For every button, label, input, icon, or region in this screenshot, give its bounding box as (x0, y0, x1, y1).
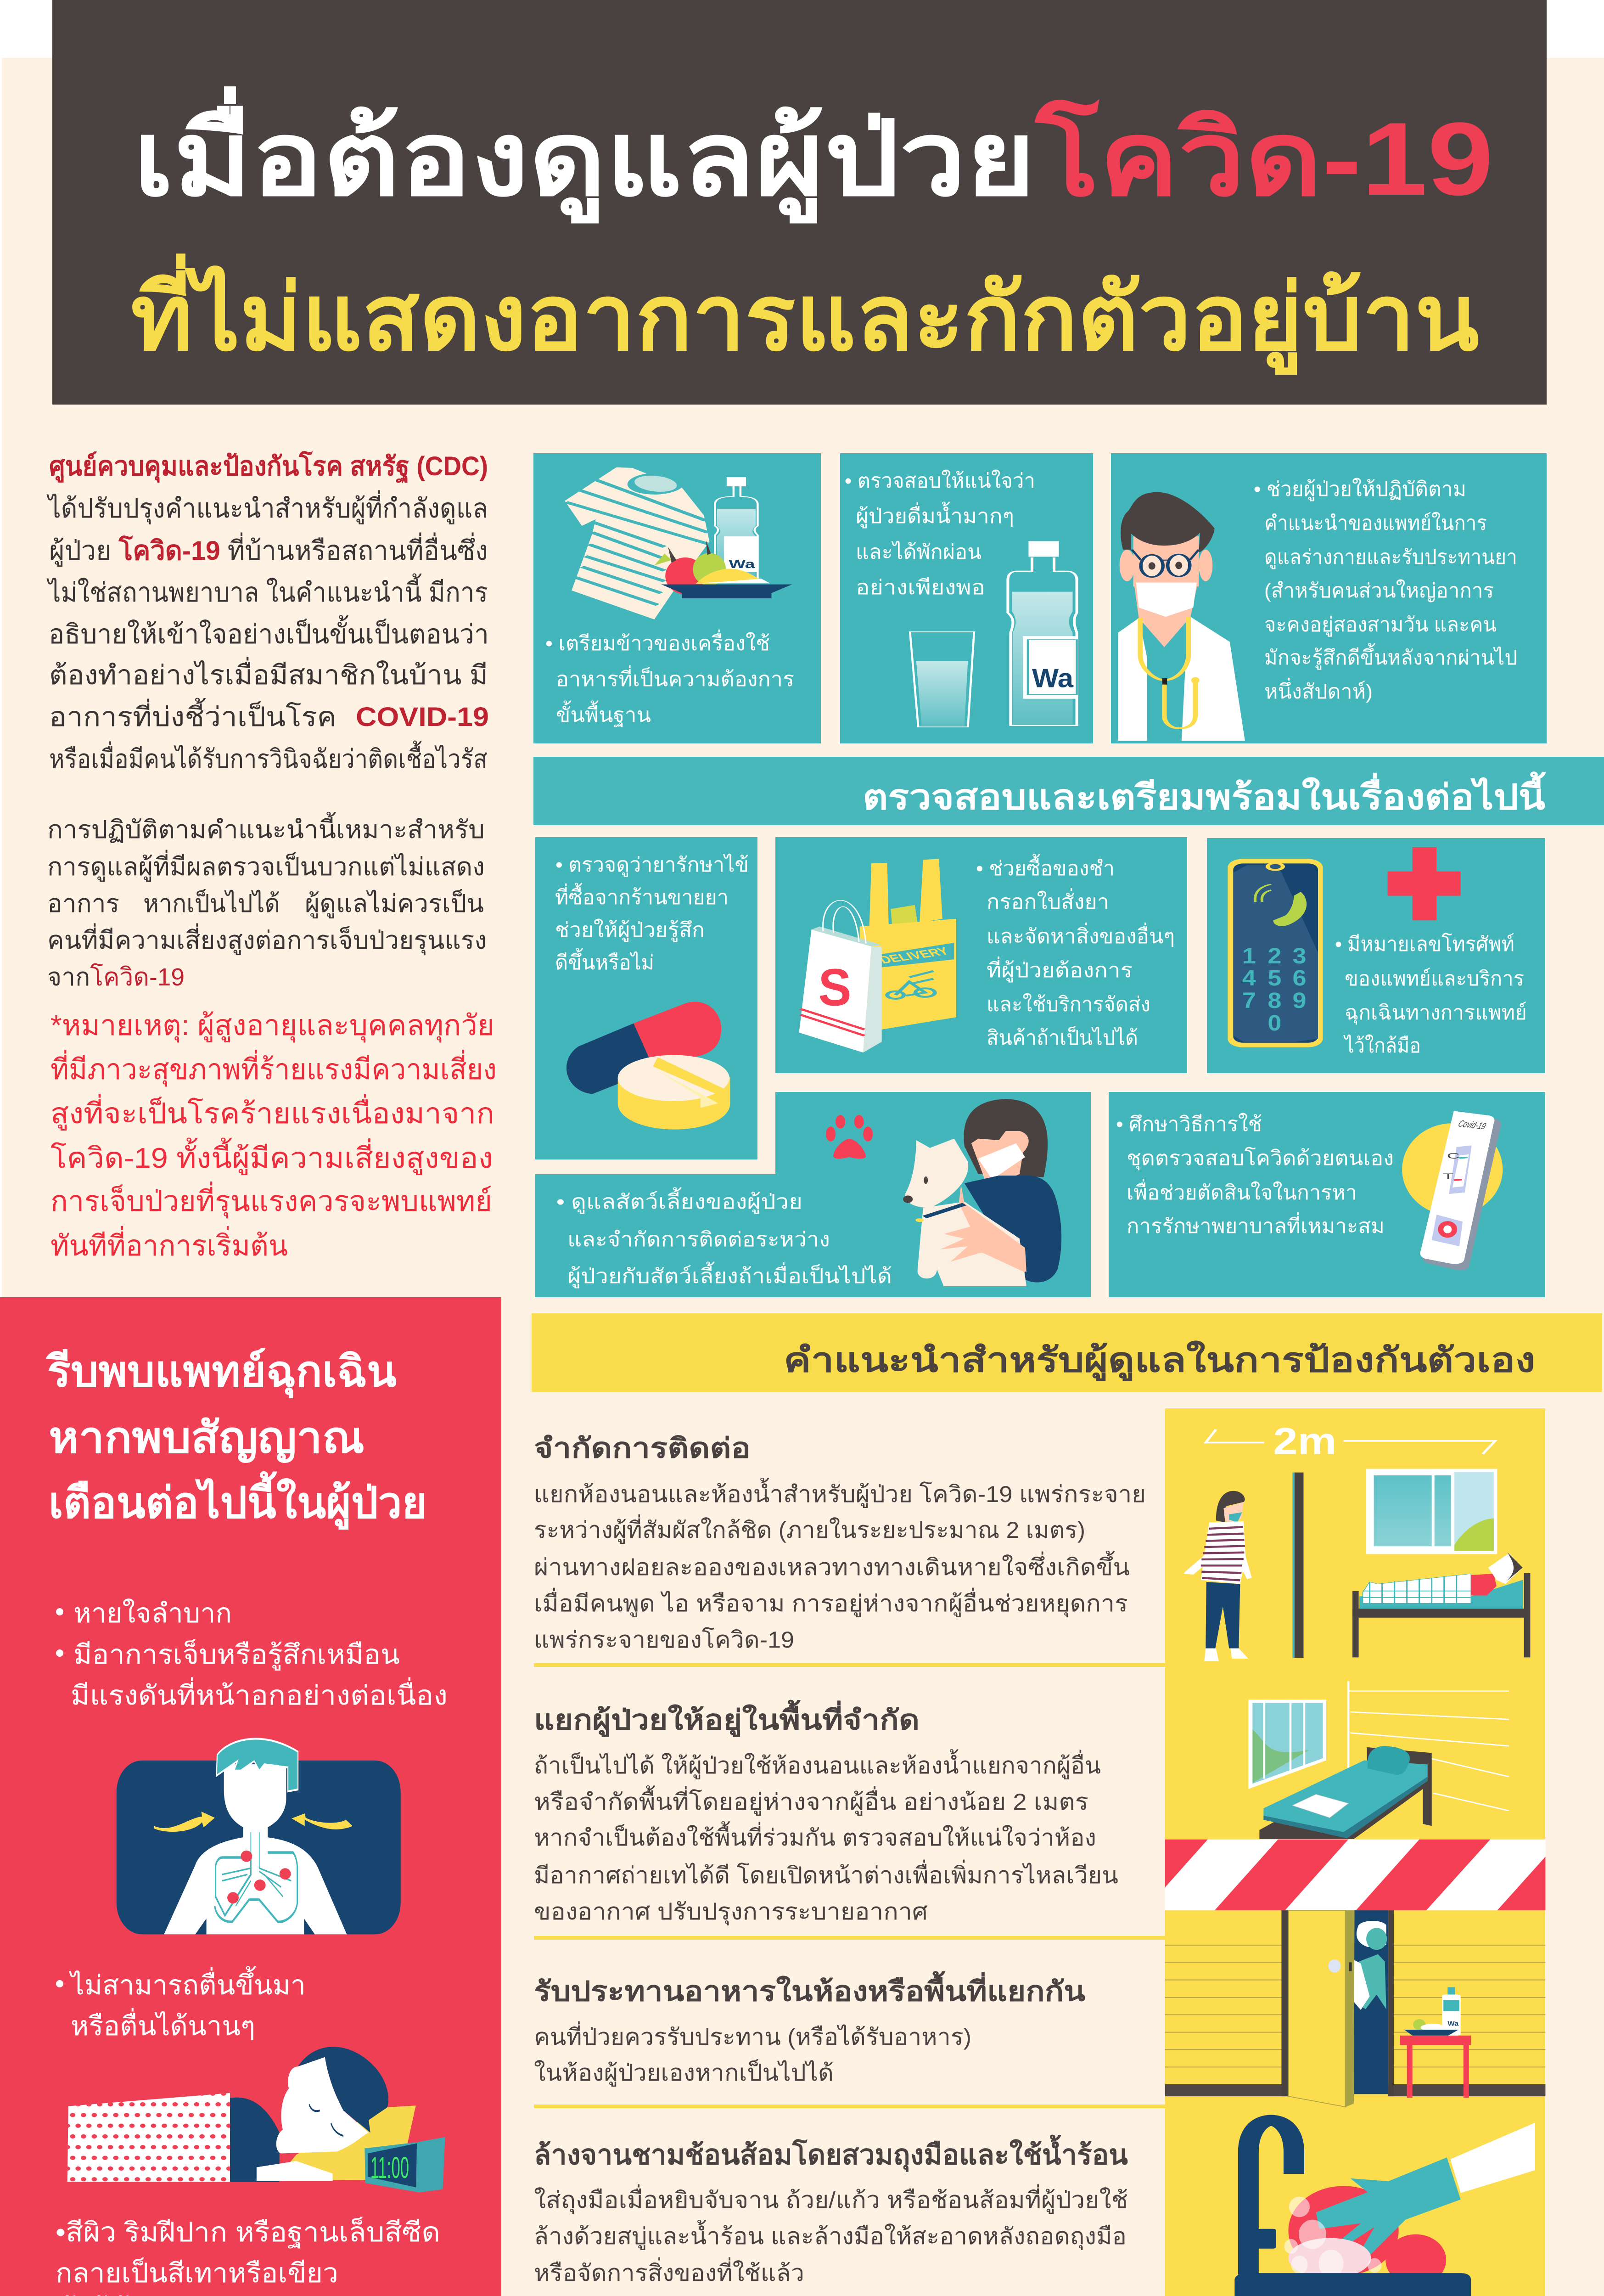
guidance 2: isolate patient (534, 1699, 1118, 1925)
guidance 4: wash dishes: ใส่ถุงมือเมื่อหยิบจับจาน ถ้วย/แก้ว หรือช้อนส้อมที่ผู้ป่วยใช้ (534, 2184, 1128, 2214)
illustration: washing dishes (1234, 2121, 1535, 2296)
text: breathing and chest symptoms (56, 1598, 448, 1711)
intro paragraph: CDC guidance: ได้ปรับปรุงคำแนะนำสำหรับผู้ที่กำลังดูแล (46, 490, 488, 525)
intro paragraph: who this applies to: จากโควิด-19 (47, 963, 185, 991)
text: follow doctor's advice: จะคงอยู่สองสามวัน และคน (1264, 613, 1497, 637)
guidance 1: limit contact: เมื่อมีคนพูด ไอ หรือจาม การอยู่ห่างจากผู้อื่นช่วยหยุดการ (534, 1588, 1128, 1617)
guidance 4: wash dishes: ล้างจานชามช้อนส้อมโดยสวมถุงมือและใช้น้ำร้อน (534, 2134, 1128, 2172)
illustration: two metre distance (1183, 1420, 1530, 1661)
panel: emergency warning signs (0, 1297, 501, 2296)
panel: drink water and rest: Wa (1032, 664, 1073, 693)
panel: drink water and rest (840, 453, 1093, 743)
illustration: barrier, door and food tray (1165, 1840, 1545, 2107)
text: follow doctor's advice: หนึ่งสัปดาห์) (1264, 677, 1373, 703)
text: phone numbers: ฉุกเฉินทางการแพทย์ (1345, 1002, 1527, 1025)
guidance 1: limit contact: ระหว่างผู้ที่สัมผัสใกล้ชิด (ภายในระยะประมาณ 2 เมตร) (534, 1514, 1085, 1544)
guidance 2: isolate patient: ถ้าเป็นไปได้ ให้ผู้ป่วยใช้ห้องนอนและห้องน้ำแยกจากผู้อื่น (534, 1749, 1101, 1779)
text: cannot wake: ไม่สามารถตื่นขึ้นมา (69, 1966, 306, 2000)
text: prepare food: • เตรียมข้าวของเครื่องใช้ (545, 629, 770, 655)
icon: covid antigen test: Covid-19 (1456, 1119, 1488, 1131)
intro paragraph: who this applies to: ผู้ดูแลไม่ควรเป็น (305, 889, 484, 918)
text: help with shopping: • ช่วยซื้อของชำ (976, 854, 1115, 880)
text: fever medicine: ช่วยให้ผู้ป่วยรู้สึก (555, 918, 705, 942)
text: follow doctor's advice: มักจะรู้สึกดีขึ้นหลังจากผ่านไป (1264, 643, 1517, 670)
icon: covid antigen test: C (1447, 1152, 1460, 1160)
guidance 3: eat separately: รับประทานอาหารในห้องหรือพื้นที่แยกกัน (534, 1971, 1085, 2007)
guidance 4: wash dishes: หรือจัดการสิ่งของที่ใช้แล้ว (534, 2257, 804, 2286)
icon: delivery and shopping bags: S (819, 958, 852, 1017)
icon: phone and red cross: 0 (1267, 1010, 1281, 1035)
icon: phone and red cross: 8 (1267, 988, 1281, 1013)
icon: phone and red cross: 2 (1267, 943, 1281, 968)
text: breathing and chest symptoms: มีอาการเจ็บหรือรู้สึกเหมือน (73, 1639, 400, 1671)
text: help with shopping: สินค้าถ้าเป็นไปได้ (987, 1026, 1138, 1049)
text: self-test kit: เพื่อช่วยตัดสินใจในการหา (1127, 1178, 1357, 1204)
intro paragraph: CDC guidance: ผู้ป่วย โควิด-19 ที่บ้านหรือสถานที่อื่นซึ่ง (49, 532, 488, 567)
text: help with shopping: กรอกใบสั่งยา (987, 888, 1109, 913)
heading bar: caregiver self protection: คำแนะนำสำหรับผู้ดูแลในการป้องกันตัวเอง (784, 1340, 1535, 1381)
heading: seek emergency care (45, 1347, 427, 1530)
text: prepare food (545, 629, 794, 727)
guidance 1: limit contact: แยกห้องนอนและห้องน้ำสำหรับผู้ป่วย โควิด-19 แพร่กระจาย (534, 1478, 1146, 1508)
heading bar: caregiver self protection (532, 1313, 1602, 1392)
illustration column (1165, 1408, 1545, 2296)
text: help with shopping: และใช้บริการจัดส่ง (987, 993, 1150, 1016)
text: water and rest: • ตรวจสอบให้แน่ใจว่า (845, 469, 1035, 492)
text: care for pets: และจำกัดการติดต่อระหว่าง (567, 1228, 830, 1251)
text: water and rest: ผู้ป่วยดื่มน้ำมากๆ (856, 501, 1014, 529)
icon: phone and red cross: 3 (1292, 943, 1306, 968)
icon: sleeping person and alarm clock: 11:00 (370, 2151, 409, 2185)
icon: doctor with mask and stethoscope (1118, 492, 1245, 741)
text: prepare food: อาหารที่เป็นความต้องการ (556, 665, 794, 691)
guidance 4: wash dishes (534, 2134, 1128, 2286)
intro paragraph: CDC guidance: ไม่ใช่สถานพยาบาล ในคำแนะนำนี้ มีการ (46, 574, 488, 608)
text: fever medicine: ที่ซื้อจากร้านขายยา (555, 883, 729, 909)
guidance 2: isolate patient: หรือจำกัดพื้นที่โดยอยู่ห่างจากผู้อื่น อย่างน้อย 2 เมตร (534, 1785, 1088, 1816)
title banner: ที่ไม่แสดงอาการและกักตัวอยู่บ้าน (131, 253, 1479, 375)
text: follow doctor's advice: (สำหรับคนส่วนใหญ่อาการ (1264, 579, 1494, 602)
text: cannot wake: หรือตื่นได้นานๆ (71, 2008, 255, 2041)
text: self-test kit (1116, 1113, 1394, 1238)
text: self-test kit: ชุดตรวจสอบโควิดด้วยตนเอง (1127, 1147, 1394, 1171)
icon: covid antigen test (1402, 1111, 1503, 1270)
text: breathing and chest symptoms: หายใจลำบาก (73, 1598, 232, 1628)
text: follow doctor's advice: ดูแลร่างกายและรับประทานยา (1264, 546, 1517, 569)
guidance 1: limit contact: จำกัดการติดต่อ (534, 1433, 751, 1463)
icon: delivery and shopping bags (799, 859, 956, 1052)
illustration: barrier, door and food tray: Wa (1447, 2020, 1459, 2027)
text: cannot wake (56, 1966, 306, 2041)
text: care for pets (556, 1187, 892, 1289)
text: water and rest (845, 469, 1035, 599)
text: follow doctor's advice: คำแนะนำของแพทย์ในการ (1264, 512, 1487, 535)
heading bar: check and prepare: ตรวจสอบและเตรียมพร้อมในเรื่องต่อไปนี้ (863, 771, 1547, 817)
intro paragraph: CDC guidance: ต้องทำอย่างไรเมื่อมีสมาชิกในบ้าน มี (49, 657, 488, 690)
icon: phone and red cross: 1 (1242, 943, 1256, 968)
icon: phone and red cross: 6 (1292, 965, 1306, 990)
guidance 2: isolate patient: แยกผู้ป่วยให้อยู่ในพื้นที่จำกัด (534, 1699, 920, 1737)
icon: capsule and tablet (566, 1002, 730, 1130)
red note on high-risk people (50, 1010, 497, 1262)
intro paragraph: who this applies to: อาการ (47, 890, 119, 917)
guidance 3: eat separately: ในห้องผู้ป่วยเองหากเป็นไปได้ (534, 2059, 834, 2087)
text: phone numbers: ของแพทย์และบริการ (1345, 968, 1524, 990)
text: fever medicine: • ตรวจดูว่ายารักษาไข้ (555, 853, 749, 877)
heading: seek emergency care: รีบพบแพทย์ฉุกเฉิน (45, 1347, 397, 1398)
text: breathing and chest symptoms: มีแรงดันที่หน้าอกอย่างต่อเนื่อง (71, 1677, 448, 1711)
icon: shirt, bottle and fruit: Wa (729, 557, 755, 571)
icon: glass and water bottle (910, 541, 1077, 727)
icon: phone and red cross (1228, 847, 1461, 1047)
intro paragraph: who this applies to: หากเป็นไปได้ (143, 889, 280, 917)
guidance 2: isolate patient: มีอากาศถ่ายเทได้ดี โดยเปิดหน้าต่างเพื่อเพิ่มการไหลเวียน (534, 1860, 1118, 1888)
intro paragraph: who this applies to: การดูแลผู้ที่มีผลตรวจเป็นบวกแต่ไม่แสดง (47, 850, 485, 882)
text: care for pets: ผู้ป่วยกับสัตว์เลี้ยงถ้าเมื่อเป็นไปได้ (567, 1261, 892, 1289)
intro paragraph: who this applies to (47, 812, 487, 991)
text: prepare food: ขั้นพื้นฐาน (556, 700, 651, 727)
icon: phone and red cross: 7 (1242, 988, 1256, 1013)
text: water and rest: และได้พักผ่อน (856, 540, 981, 563)
text: follow doctor's advice: • ช่วยผู้ป่วยให้ปฏิบัติตาม (1254, 478, 1466, 501)
text: self-test kit: การรักษาพยาบาลที่เหมาะสม (1127, 1212, 1385, 1238)
text: phone numbers (1335, 933, 1527, 1057)
panel: follow doctor's advice (1111, 453, 1547, 743)
intro paragraph: CDC guidance: อาการที่บ่งชี้ว่าเป็นโรค (49, 698, 337, 732)
text: skin colour symptom: •สีผิว ริมฝีปาก หรือฐานเล็บสีซีด (56, 2217, 440, 2248)
icon: phone and red cross: 5 (1267, 965, 1281, 990)
intro paragraph: CDC guidance: ศูนย์ควบคุมและป้องกันโรค สหรัฐ (CDC) (49, 450, 488, 484)
intro paragraph: who this applies to: การปฏิบัติตามคำแนะนำนี้เหมาะสำหรับ (47, 812, 485, 844)
red note on high-risk people: การเจ็บป่วยที่รุนแรงควรจะพบแพทย์ (50, 1182, 492, 1218)
title banner (52, 0, 1547, 405)
intro paragraph: CDC guidance (46, 450, 489, 773)
panel: check fever medicine (535, 837, 757, 1159)
text: skin colour symptom: กลายเป็นสีเทาหรือเขียว (56, 2257, 338, 2288)
intro paragraph: CDC guidance: อธิบายให้เข้าใจอย่างเป็นขั้นเป็นตอนว่า (49, 615, 489, 649)
icon: shirt, bottle and fruit (565, 467, 792, 619)
red note on high-risk people: ทันทีที่อาการเริ่มต้น (50, 1226, 288, 1262)
illustration: separate room (1248, 1681, 1509, 1839)
icon: sleeping person and alarm clock (67, 2047, 445, 2193)
text: self-test kit: • ศึกษาวิธีการใช้ (1116, 1113, 1262, 1136)
text: phone numbers: ไว้ใกล้มือ (1343, 1034, 1421, 1057)
intro paragraph: CDC guidance: หรือเมื่อมีคนได้รับการวินิจฉัยว่าติดเชื้อไวรัส (49, 741, 488, 773)
text: fever medicine (555, 853, 749, 974)
heading: seek emergency care: เตือนต่อไปนี้ในผู้ป่วย (49, 1471, 427, 1530)
guidance 3: eat separately (534, 1971, 1085, 2087)
icon: person with lungs (117, 1739, 401, 1934)
icon: phone and red cross: 9 (1292, 988, 1306, 1013)
guidance 2: isolate patient: ของอากาศ ปรับปรุงการระบายอากาศ (534, 1899, 928, 1925)
text: care for pets: • ดูแลสัตว์เลี้ยงของผู้ป่วย (556, 1187, 802, 1214)
text: help with shopping: ที่ผู้ป่วยต้องการ (987, 956, 1133, 983)
text: skin colour symptom (56, 2217, 440, 2296)
red note on high-risk people: สูงที่จะเป็นโรคร้ายแรงเนื่องมาจาก (50, 1094, 494, 1131)
panel: help with shopping and prescriptions (775, 837, 1187, 1073)
intro paragraph: who this applies to: คนที่มีความเสี่ยงสูงต่อการเจ็บป่วยรุนแรง (47, 923, 487, 956)
red note on high-risk people: โควิด-19 ทั้งนี้ผู้มีความเสี่ยงสูงของ (50, 1137, 493, 1175)
title banner: เมื่อต้องดูแลผู้ป่วย โควิด-19 (133, 86, 1493, 224)
text: water and rest: อย่างเพียงพอ (856, 576, 985, 599)
text: phone numbers: • มีหมายเลขโทรศัพท์ (1335, 933, 1514, 956)
icon: delivery and shopping bags: DELIVERY (877, 945, 952, 966)
text: follow doctor's advice (1254, 478, 1517, 703)
heading bar: check and prepare (533, 757, 1604, 825)
intro paragraph: CDC guidance: COVID-19 (356, 702, 489, 732)
text: help with shopping: และจัดหาสิ่งของอื่นๆ (987, 922, 1175, 948)
red note on high-risk people: ที่มีภาวะสุขภาพที่ร้ายแรงมีความเสี่ยง (50, 1050, 497, 1086)
panel: care for pets (535, 1092, 1091, 1297)
red note on high-risk people: *หมายเหตุ: ผู้สูงอายุและบุคคลทุกวัย (50, 1010, 494, 1042)
text: help with shopping (976, 854, 1175, 1049)
heading: seek emergency care: หากพบสัญญาณ (49, 1413, 365, 1463)
icon: person hugging dog and paw print (826, 1099, 1061, 1286)
guidance 1: limit contact (534, 1433, 1146, 1653)
guidance 1: limit contact: แพร่กระจายของโควิด-19 (534, 1627, 794, 1653)
guidance 3: eat separately: คนที่ป่วยควรรับประทาน (หรือได้รับอาหาร) (534, 2021, 971, 2050)
panel: prepare food and household supplies (533, 453, 821, 743)
guidance 2: isolate patient: หากจำเป็นต้องใช้พื้นที่ร่วมกัน ตรวจสอบให้แน่ใจว่าห้อง (534, 1821, 1096, 1851)
icon: phone and red cross: 4 (1242, 965, 1256, 990)
icon: covid antigen test: T (1443, 1172, 1454, 1181)
guidance 4: wash dishes: ล้างด้วยสบู่และน้ำร้อน และล้างมือให้สะอาดหลังถอดถุงมือ (534, 2220, 1127, 2250)
guidance 1: limit contact: ผ่านทางฝอยละอองของเหลวทางทางเดินหายใจซึ่งเกิดขึ้น (534, 1551, 1130, 1580)
panel: keep phone numbers at hand (1207, 838, 1545, 1073)
text: fever medicine: ดีขึ้นหรือไม่ (555, 948, 654, 974)
illustration: two metre distance: 2m (1273, 1420, 1337, 1463)
panel: self-test kit (1109, 1092, 1545, 1297)
